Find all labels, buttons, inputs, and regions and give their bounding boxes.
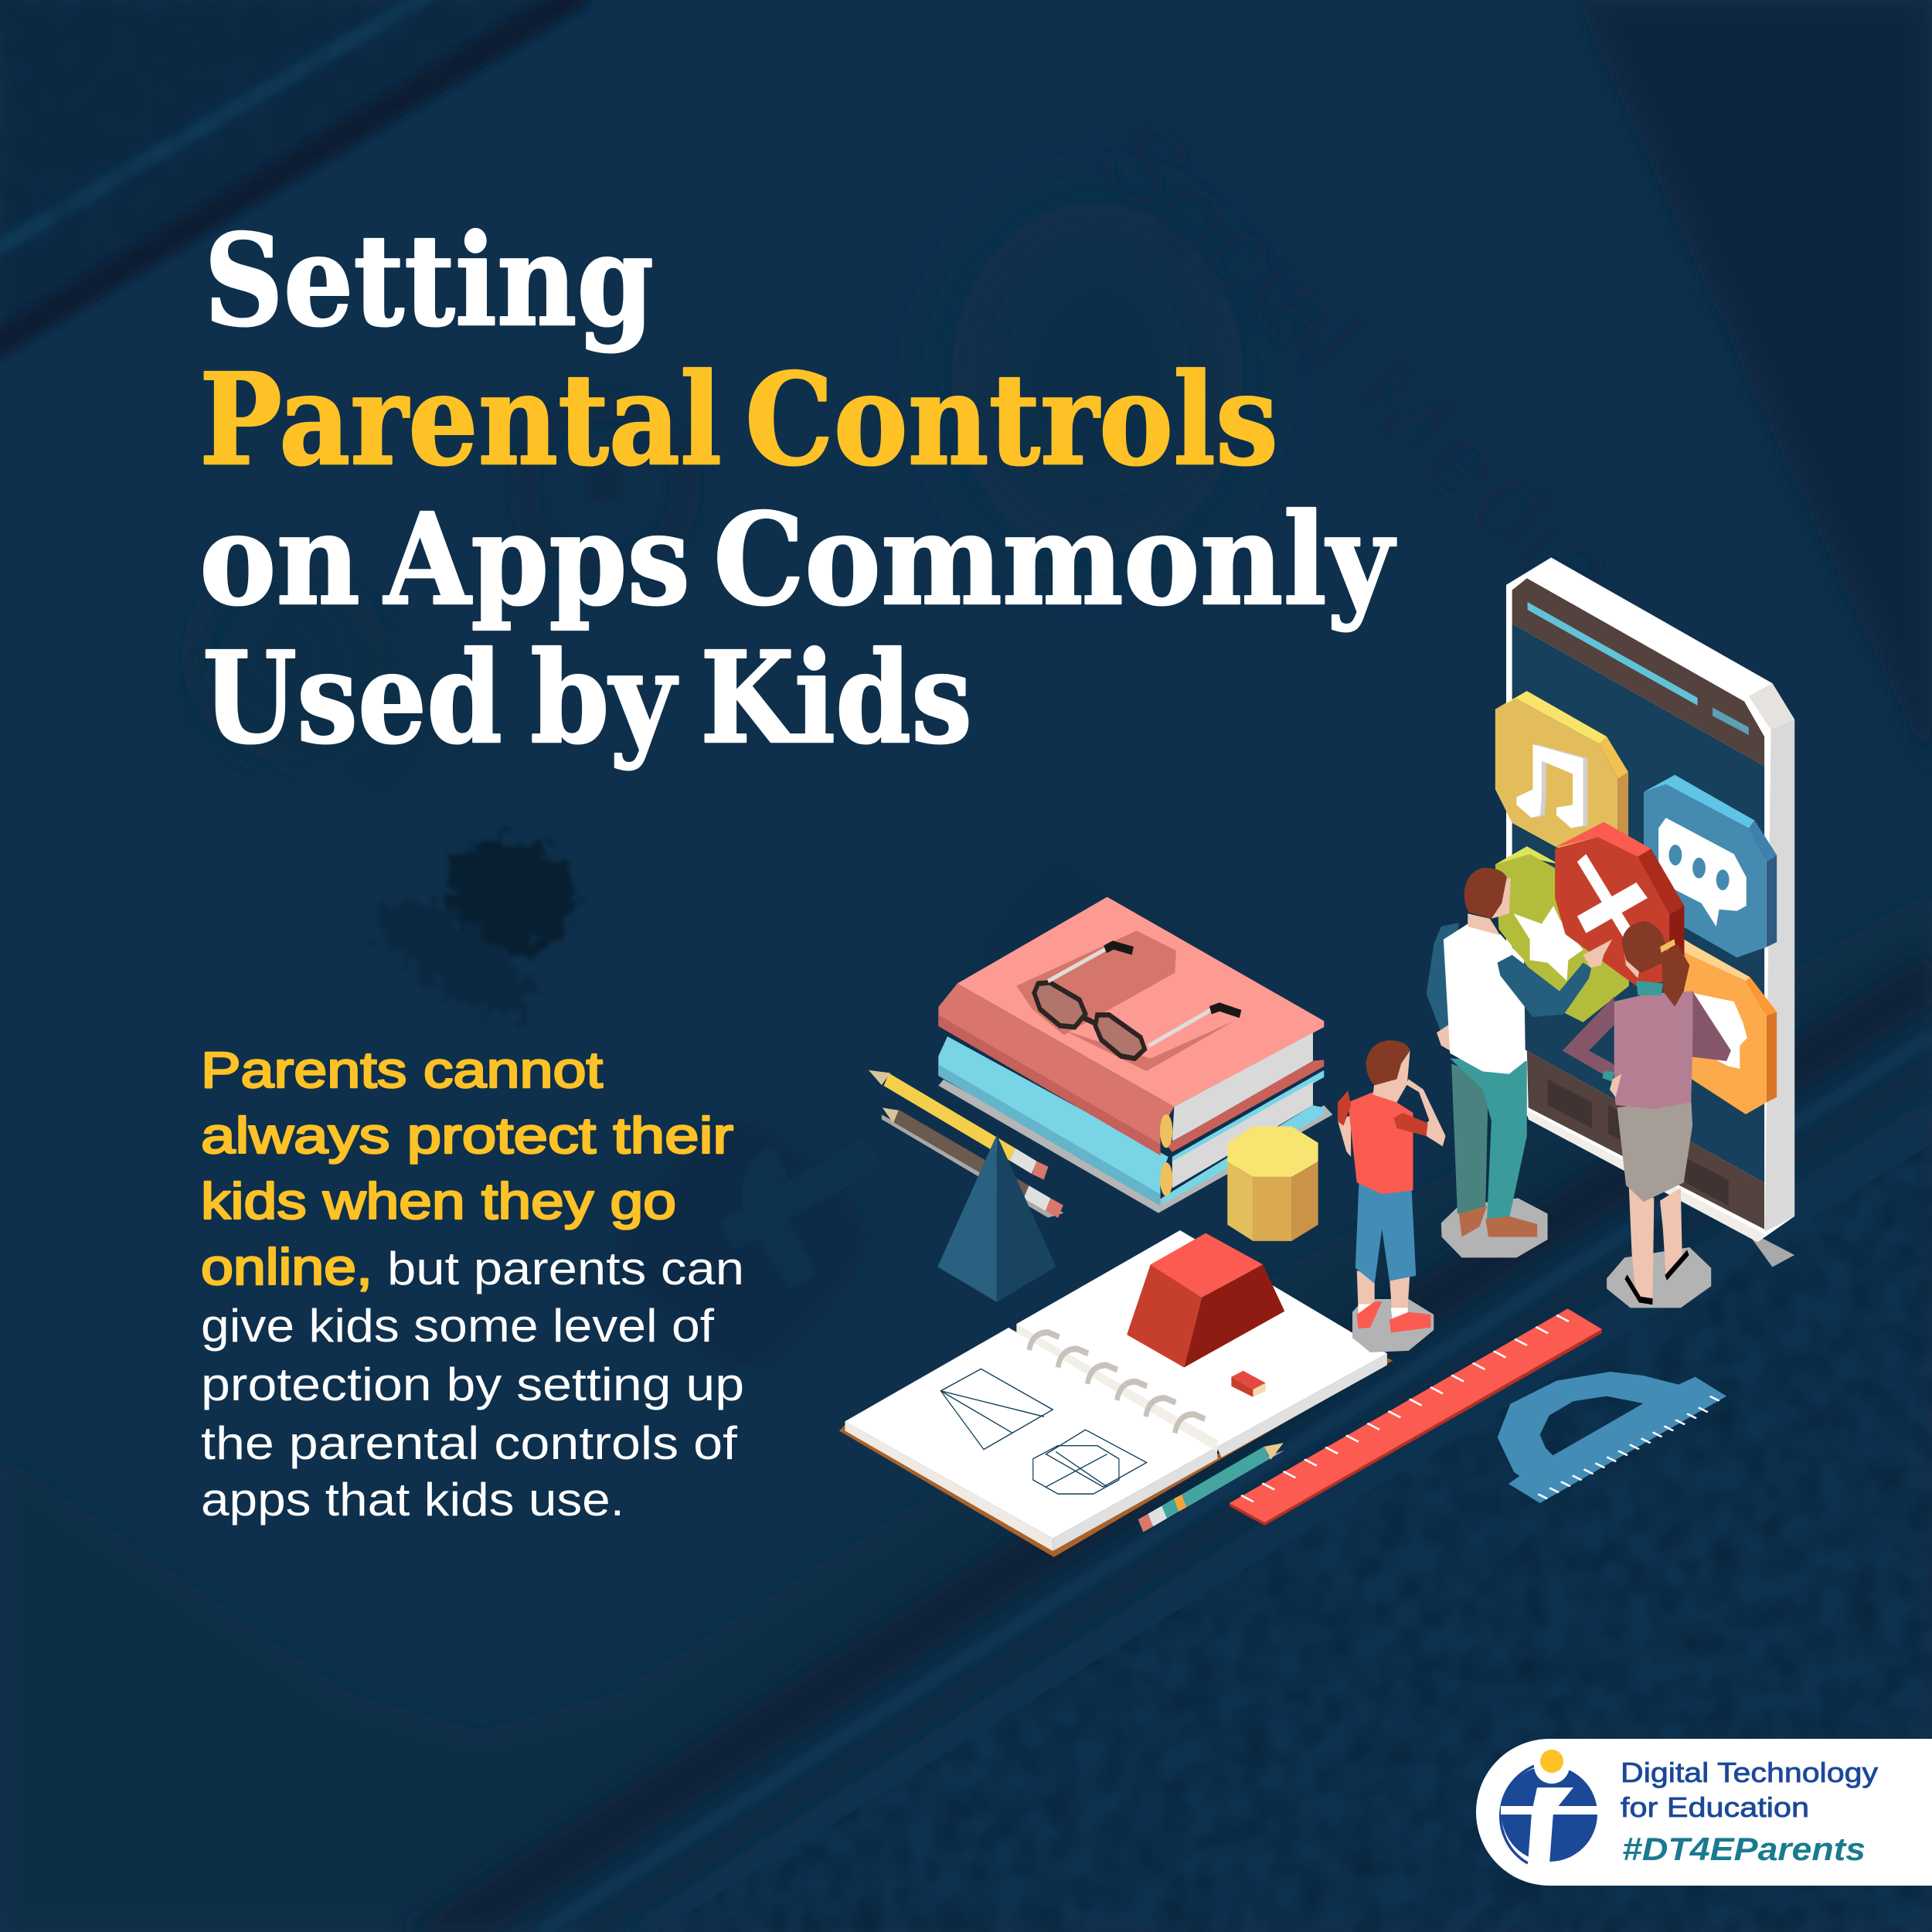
ruler (1230, 1308, 1602, 1526)
illustration: desk objects (839, 897, 1393, 1557)
body text: apps that kids use. (201, 1474, 624, 1526)
title: Controls (745, 346, 1278, 494)
pyramid (937, 1134, 1056, 1302)
body text: always protect their (201, 1107, 733, 1164)
trapezoid block (1127, 1233, 1284, 1368)
octagonal prism (1227, 1126, 1318, 1241)
logo text: #DT4EParents (1622, 1831, 1866, 1867)
body text: Parents cannot (201, 1041, 603, 1098)
title (199, 207, 1396, 772)
logo text (1621, 1757, 1878, 1867)
title: Commonly (713, 486, 1396, 634)
title: Setting (204, 207, 654, 355)
body text: protection by setting up (201, 1359, 744, 1410)
title: on (199, 486, 360, 634)
logo badge (1476, 1739, 1932, 1886)
drawing: triangle sketch (940, 1369, 1053, 1450)
notebook (839, 1230, 1393, 1557)
body text: but parents can (387, 1243, 744, 1294)
title: Used (202, 624, 502, 772)
illustration: ruler and protractor (1230, 1308, 1726, 1526)
icon: chat app (1644, 775, 1777, 957)
body text: give kids some level of (201, 1300, 714, 1352)
icon: music app (1495, 691, 1628, 852)
logo mark (1501, 1748, 1598, 1864)
icon: star app (1495, 846, 1629, 1022)
icon: blocked app (1555, 822, 1684, 986)
title: Kids (700, 624, 972, 772)
small eraser (1231, 1371, 1266, 1397)
title: Parental (199, 346, 722, 494)
faint phone label: Social Media (1073, 90, 1647, 637)
title: by (530, 624, 679, 772)
man (1427, 868, 1612, 1257)
body text: kids when they go (201, 1172, 676, 1230)
teal pencil (1139, 1443, 1284, 1529)
books stack (938, 897, 1332, 1213)
woman (1563, 921, 1731, 1308)
glasses (1016, 930, 1240, 1071)
logo text: Digital Technology (1621, 1757, 1878, 1788)
illustration: phone and family (1338, 557, 1794, 1352)
boy (1338, 1040, 1446, 1352)
pencils (869, 1070, 1064, 1218)
protractor (1498, 1372, 1726, 1503)
body text: the parental controls of (201, 1417, 737, 1469)
phone (1506, 557, 1794, 1267)
title: Apps (383, 486, 690, 634)
body text: online, (201, 1238, 372, 1295)
body text (201, 1041, 744, 1526)
icon: megaphone app (1684, 940, 1777, 1114)
logo text: for Education (1621, 1791, 1809, 1823)
drawing: octagon sketch (1033, 1430, 1147, 1494)
